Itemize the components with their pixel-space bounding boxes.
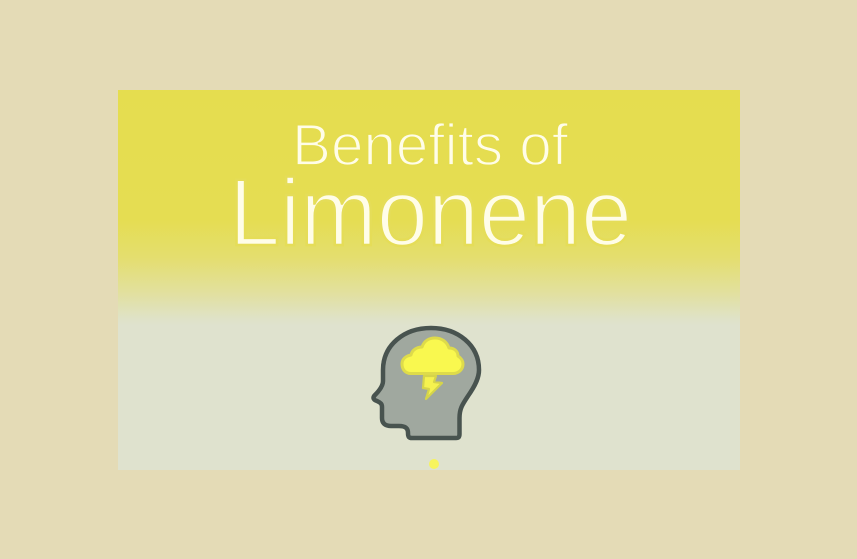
head silhouette [374, 328, 479, 438]
heading: Benefits of: Benefits of [292, 113, 569, 178]
lightning bolt [423, 376, 442, 399]
panel: gradient card [118, 90, 740, 470]
storm cloud [402, 338, 463, 374]
heading: Limonene: Limonene [229, 160, 632, 266]
title [229, 113, 632, 266]
carousel dot [429, 459, 439, 469]
icon: head with storm cloud [374, 328, 479, 438]
